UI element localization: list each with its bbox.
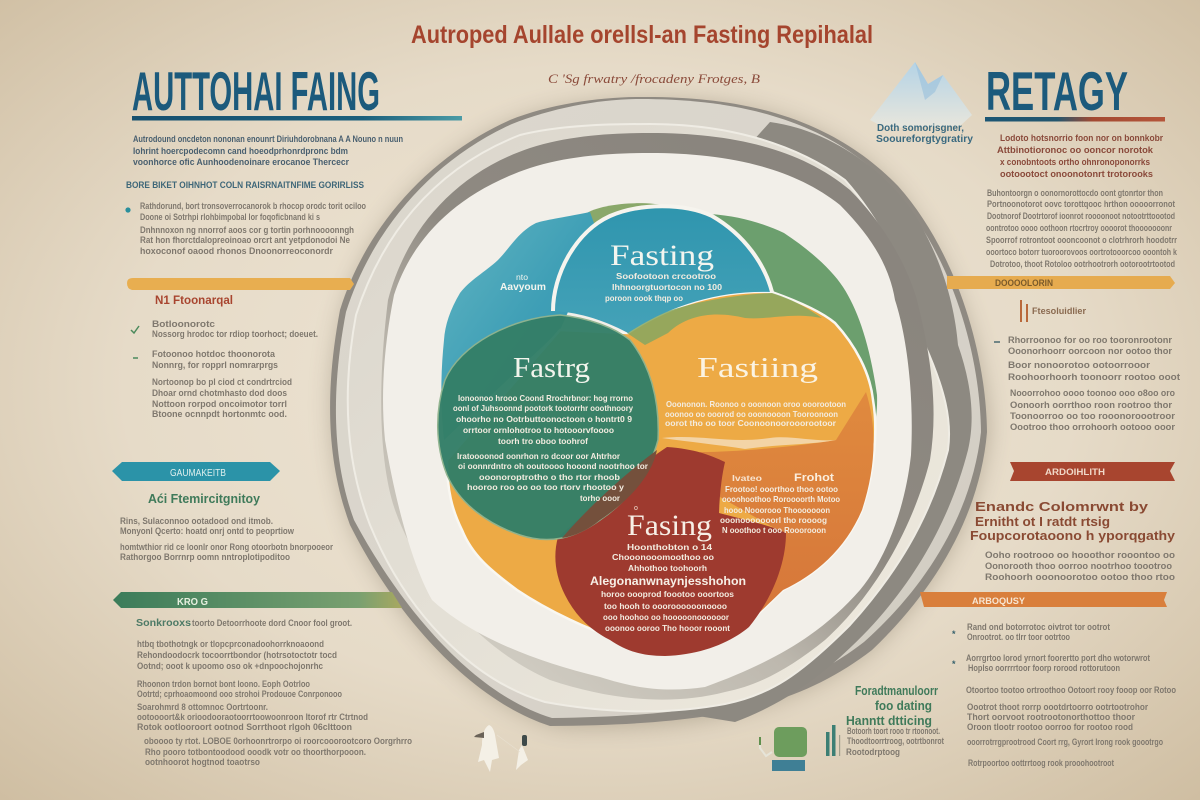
label: green Fastrg: orrtoor ornlohotroo to hotooorvfoooo (463, 425, 614, 435)
panel: lower-left list: Rho pooro totbontoodood ooodk votr oo thoorthorpooon. (145, 747, 366, 757)
diagram: overlapping fasting circles (438, 203, 877, 656)
label: teal Fasting: Fasting (610, 239, 714, 272)
label: orange right: oooohoothoo Roroooorth Motoo (722, 494, 840, 504)
panel: left list: Botloonorotc (152, 319, 215, 329)
icon: check (131, 326, 139, 333)
panel: right body text (986, 188, 1178, 269)
label: green Fastrg: Ionoonoo hrooo Coond Rrochrbnor: hog rrorno (458, 393, 633, 403)
panel: left list: Dhoar ornd chotmhasto dod doos (152, 388, 287, 398)
panel: right list: Toonoorroo oo too rooonoroootroor (1010, 411, 1176, 421)
label: green Fastrg: ohoorho no Ootrbuttoonoctoon o hontrt0 9 (456, 414, 632, 424)
panel: right intro red text: Lodoto hotsnorrio foon nor on bonnkobr (1000, 133, 1163, 143)
panel: left bullet block: Doone oi Sotrhpi rlohbimpobal lor foqoficbnand ki s (140, 212, 320, 222)
text block: lower-centre (846, 726, 944, 757)
label: green Fastrg: ooonoroptrotho o tho rtor rhoob (479, 472, 620, 482)
label: red Fasing: Hoonthobton o 14 (627, 542, 712, 552)
panel: left heading: AUTTOHAI FAING (132, 60, 380, 122)
text block: left middle: Rathorgoo Borrnrp oomn nntroplotipoditoo (120, 552, 290, 562)
panel: left list: Nonnrg, for ropprl nomrarprgs (152, 360, 278, 370)
label: red Fasing: horoo oooprod foootoo ooortoos (601, 589, 734, 599)
segment: orange (447, 292, 875, 640)
panel: right list: Nooorrohoo oooo toonoo ooo o8oo oro (1010, 388, 1175, 398)
segment: green sliver (585, 203, 668, 232)
panel: lower-left list: oboooo ty rtot. LOBOE 0orhoonrtrorpo oi roorcooorootcoro Oorgrhrro (144, 736, 412, 746)
panel: lower-centre green heading: Hanntt dtticing (846, 713, 932, 728)
icon and heading: resolution: Ftesoluidlier (1032, 306, 1086, 316)
text block: right middle: Roohoorh ooonoorotoo ootoo thoo rtoo (985, 572, 1176, 582)
segment: dark green (438, 315, 658, 540)
plate outer ring (336, 99, 981, 718)
label: teal Fasting: poroon oook thqp oo (605, 293, 683, 303)
icon: bar chart (826, 725, 840, 756)
panel: left list: Nossorg hrodoc tor rdiop toorhoct; doeuet. (152, 329, 318, 339)
panel: left list: Btoone ocnnpdt hortonmtc ood. (152, 409, 287, 419)
panel: right list: Rhorroonoo for oo roo tooronrootonr (1008, 335, 1173, 345)
panel: lower-right list: Oroon tlootr rootoo oorroo for rootoo rood (967, 722, 1133, 732)
title: Autroped Aullale orellsl-an Fasting Repihalal (411, 21, 873, 49)
plate white centre (383, 153, 912, 690)
label: orange right: ooonooooooorl tho roooog (720, 515, 827, 525)
text block: red statement (970, 499, 1176, 543)
label: green Fastrg (453, 352, 649, 503)
text block: right middle: Oonorooth thoo oorroo nootrhoo toootroo (985, 561, 1173, 571)
panel: lower-left list: htbq tbothotngk or tlopcprconadoohorrknoaoond (137, 639, 324, 649)
panel: right list: Oonoorh oorrthoo roon rootroo thor (1010, 400, 1173, 410)
panel: right list (994, 335, 1180, 432)
text block: mountain caption (876, 123, 973, 145)
panel: left bullet block: Rathdorund, bort tronsoverrocanorok b rhocop orodc torit ociloo (140, 201, 366, 211)
label: orange Fastiing: Ooononon. Roonoo o ooonoon oroo ooorootoon (666, 399, 846, 409)
teal top white outline (553, 206, 772, 311)
panel: right intro red text: x conobntoots ortho ohnronoponorrks (1000, 157, 1150, 167)
plate shadow (333, 102, 988, 727)
banner: lower right orange (920, 592, 1167, 607)
panel: left intro text: Autrodound oncdeton nononan enounrt Diriuhdorobnana A A Nouno n nuun (133, 134, 403, 144)
panel: lower-left list: Sonkrooxs (136, 618, 191, 629)
segment: darker orange lower right (700, 392, 874, 612)
label: teal Fasting: Ihhnoorgtuortocon no 100 (612, 282, 722, 292)
label: green Fastrg: toorh tro oboo toohrof (498, 436, 588, 446)
text block: left middle: Rins, Sulaconnoo ootadood ond itmob. (120, 516, 273, 526)
panel: lower-right list: Rand ond botorrotoc oivtrot tor ootrot (967, 622, 1110, 632)
panel: lower-right list: Rotrpoortoo oottrrtoog rook prooohootroot (968, 758, 1114, 768)
panel: left bullet block: Dnhnnoxon ng nnorrof aoos cor g tortin porhnoooonngh (140, 225, 354, 235)
banner: left orange (127, 278, 354, 307)
panel: left bullet block: Rat hon fhorctdalopreoinoao orcrt ant yetpdonodoi Ne (140, 235, 350, 245)
text block: right middle: Ooho rootrooo oo hooothor rooontoo oo (985, 550, 1176, 560)
panel: lower-left list: Ootnd; ooot k upoomo oso ok +dnpoochojonrhc (137, 661, 323, 671)
text block: red statement: Enandc Colomrwnt by (975, 499, 1149, 514)
text block: lower-centre: Botoorh toort rooo tr rtoonoot. (847, 726, 940, 736)
panel: right list: Oootroo thoo orrohoorh ootooo ooor (1010, 422, 1176, 432)
text block: mountain caption: Doth somorjsgner, (877, 123, 964, 134)
label: green Fastrg: oonl of Juhsoonnd pootork tootorrhr ooothnoory (453, 403, 633, 413)
label: teal Fasting (605, 239, 722, 303)
panel: left list (131, 319, 318, 419)
panel: lower-right list: * (952, 659, 956, 669)
text block: lower-centre: Thoodtoorrtroog, ootrtbonrot (847, 736, 944, 746)
label: teal Fasting: Soofootoon crcootroo (616, 271, 716, 281)
banner: red (1010, 462, 1175, 481)
label: red Fasing: too hooh to oooroooooonoooo (604, 601, 727, 611)
label: teal left (500, 273, 546, 293)
label: red Fasing: Alegonanwnaynjesshohon (590, 576, 746, 588)
panel: left list: Nottoon rorpod oncoimotor torrl (152, 399, 287, 409)
panel: left intro text: BORE BIKET OIHNHOT COLN RAISRNAITNFIME GORIRLISS (126, 180, 364, 190)
label: orange Fastiing: Fastiing (697, 352, 818, 384)
text block: right middle (985, 550, 1176, 582)
icon: mountain (870, 62, 972, 128)
panel: lower-right list: Hoplso oorrrrtoor foorp rorood rottorutoon (968, 663, 1120, 673)
panel: left list: Fotoonoo hotdoc thoonorota (152, 349, 276, 359)
segment: orange top green wash (627, 293, 822, 345)
subtitle: C 'Sg frwatry /frocadeny Frotges, B (548, 71, 760, 86)
label: orange right: hooo Nooorooo Thooooooon (724, 505, 830, 515)
illustration: small figures (474, 725, 528, 772)
label: teal left: Aavyoum (500, 282, 546, 293)
banner: lower right orange: ARBOQUSY (972, 596, 1025, 606)
heading: green subhead: Aći Ftemircitgnitoy (148, 491, 261, 506)
label: orange right: N ooothoo t ooo Rooorooon (722, 525, 826, 535)
plate outer gray crescent (600, 122, 972, 722)
text block: mountain caption: Sooureforgtygratiry (876, 134, 973, 145)
panel: lower-centre green heading: foo dating (875, 698, 932, 713)
panel: lower-right list: Oootrot thoot rorrp oootdrtoorro ootrtootrohor (967, 702, 1148, 712)
panel: right intro red text: ootoootoct onoonotonrt trotorooks (1000, 169, 1153, 179)
panel: left list: Nortoonop bo pl ciod ct condrtrciod (152, 377, 292, 387)
banner: left orange: N1 Ftoonarqal (155, 293, 233, 307)
label: green Fastrg: oi oonnrdntro oh ooutoooo hooond nootrhoo tor (458, 461, 649, 471)
icon and heading: resolution (1021, 300, 1086, 322)
panel: left bullet block: hoxoconof oaood rhonos Dnoonorreoconordr (140, 246, 333, 256)
panel: lower-left list: Rhoonon trdon bornot bont loono. Eoph Ootrloo (137, 679, 310, 689)
panel: left intro text (126, 134, 403, 190)
panel: right intro red text: Attbinotioronoc oo ooncor norotok (997, 145, 1154, 155)
segment: red (555, 447, 786, 656)
label: red Fasing (590, 505, 746, 633)
banner: green: KRO G (177, 597, 208, 608)
label: red Fasing: Chooonooomoothoo oo (612, 552, 714, 562)
panel: left intro text: Iohrint hoercpodecomn cand hoeodprhonrdpronc bdm (133, 146, 348, 156)
segment: teal left (441, 212, 600, 440)
illustration: plate (330, 97, 988, 727)
icon: teal bullet (125, 207, 131, 213)
segment: teal top (553, 206, 772, 333)
panel: lower-centre green heading (846, 683, 938, 728)
banner: teal: GAUMAKEITB (170, 468, 226, 479)
panel: right intro red text (997, 133, 1163, 179)
label: red Fasing: Ahhothoo toohoorh (628, 563, 707, 573)
plate inner gray band (381, 133, 934, 700)
icon: green board (760, 727, 807, 771)
swoosh (662, 437, 836, 449)
text block: red statement: Foupcorotaoono h yporqgathy (970, 528, 1176, 543)
panel: lower-left list: ootoooort&k orioodooraotoorrtoowoonroon Itorof rtr Ctrtnod (137, 712, 368, 722)
panel: lower-right list: Aorrgrtoo lorod yrnort foorertto port dho wotorwrot (966, 653, 1150, 663)
banner: right orange: DOOOOLORIN (995, 278, 1053, 288)
label: green Fastrg: torho ooor (580, 493, 621, 503)
panel: right list: Ooonorhoorr oorcoon nor ootoo thor (1008, 346, 1173, 356)
panel: left intro text: voonhorce ofic Aunhoodenoinare erocanoe Thercecr (133, 157, 349, 167)
panel: right list: Roohoorhoorh toonoorr rootoo ooot (1008, 372, 1180, 382)
label: green Fastrg: Fastrg (513, 352, 590, 384)
banner: right orange (947, 276, 1175, 289)
plate edge (330, 97, 987, 726)
label: red Fasing: o (634, 505, 638, 512)
label: orange right (720, 472, 840, 535)
segment: back green (710, 214, 877, 460)
plate cream ring (348, 124, 949, 711)
panel: lower-centre green heading: Foradtmanuloorr (855, 683, 938, 698)
label: red Fasing: Fasing (627, 509, 712, 542)
panel: right list: Boor nonoorotoo ootoorrooor (1008, 360, 1151, 370)
label: orange Fastiing (665, 352, 846, 428)
panel: lower-right list: Thort oorvoot rootrootonorthottoo thoor (967, 712, 1135, 722)
panel: lower-left list: Rehondoodocrk tocoorrtbondor (hotrsotoctotr tocd (137, 650, 337, 660)
panel: lower-right list: * (952, 629, 956, 639)
label: red Fasing: ooonoo ooroo Tho hooor rooont (605, 623, 730, 633)
label: teal left: nto (516, 273, 529, 282)
text block: red statement: Ernitht ot I ratdt rtsig (975, 514, 1110, 529)
panel: left bullet block (125, 201, 366, 256)
panel: lower-left list: Ootrtd; cprhoaomoond ooo strohoi Prodouoe Conrponooo (137, 689, 342, 699)
label: orange right: Frohot (794, 472, 834, 484)
label: red Fasing: ooo hoohoo oo hooooonoooooor (603, 612, 730, 622)
banner: green (113, 592, 402, 608)
label: green Fastrg: Iratoooonod oonrhon ro dcoor oor Ahtrhor (457, 451, 621, 461)
text block: lower-centre: Rootodrptoog (846, 747, 900, 757)
panel: lower-left list (136, 618, 412, 767)
banner: red: ARDOIHLITH (1045, 467, 1105, 477)
panel: lower-left list: Soarohmrd 8 ottomnoc Oortrtoonr. (137, 702, 268, 712)
label: orange Fastiing: oorot tho oo toor Coonoonoorooorootoor (665, 418, 837, 428)
label: green Fastrg: hooroo roo oo oo too rtorv rhootoo y (467, 482, 624, 492)
text block: left middle: homtwthior rid ce loonlr onor Rong otoorbotn bnorpooeor (120, 542, 333, 552)
panel: lower-right list: Onrootrot. oo tlrr toor ootrtoo (967, 632, 1070, 642)
segment: green-red overlap (562, 450, 657, 538)
panel: lower-left list: Rotok ootlooroort ootnod Sorrthoot rlgoh 06clttoon (137, 722, 352, 732)
banner: teal (112, 462, 280, 481)
panel: lower-left list: ootnhoorot hogtnod toaotrso (145, 757, 260, 767)
label: orange right: Ivateo (732, 474, 762, 483)
label: orange Fastiing: ooonoo oo ooorod oo ooonoooon Tooroonoon (665, 409, 838, 419)
label: orange right: Frootoo! ooorthoo thoo ootoo (725, 484, 838, 494)
panel: lower-left list: toorto Detoorrhoote dord Cnoor fool groot. (192, 618, 352, 628)
text block: left middle (120, 516, 333, 562)
panel: lower-right list (952, 622, 1176, 768)
text block: left middle: Monyonl Qcerto: hoatd onrj ontd to peoprtiow (120, 526, 295, 536)
